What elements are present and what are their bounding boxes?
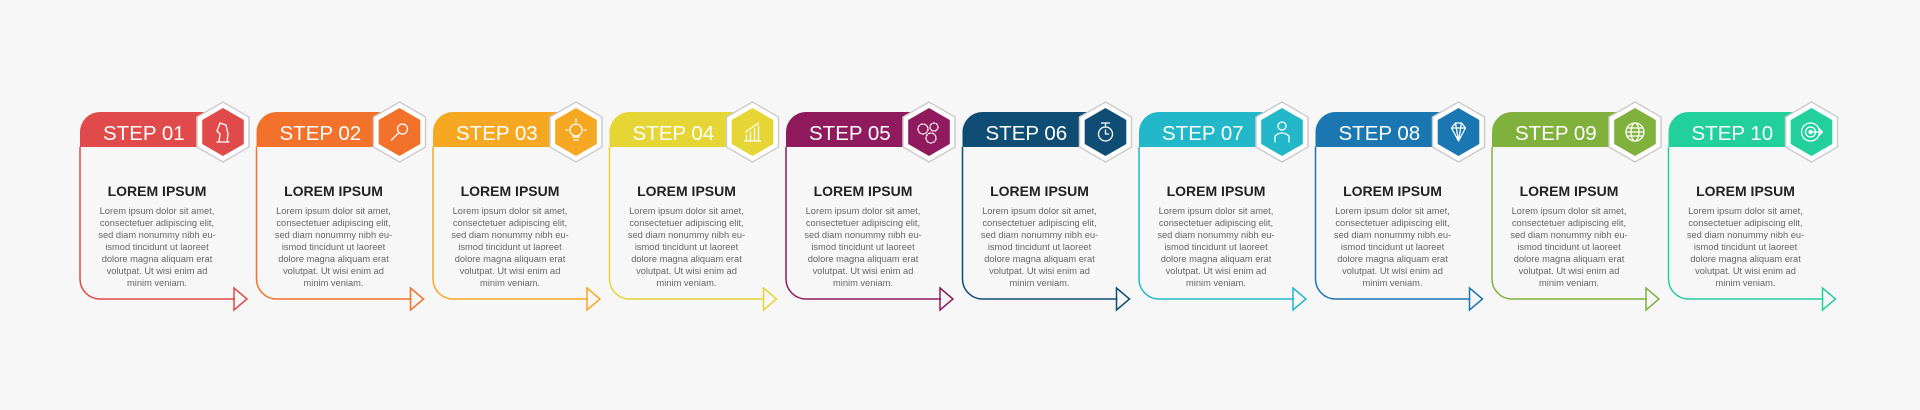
header (256, 112, 406, 147)
step 04: STEP 04 (632, 122, 714, 145)
title: LOREM IPSUM (1520, 183, 1618, 199)
title: LOREM IPSUM (461, 183, 559, 199)
header (1139, 112, 1289, 147)
hex icon: chess knight (197, 102, 249, 162)
step 04 (610, 102, 778, 310)
body text (1334, 206, 1451, 288)
outline (80, 147, 247, 310)
hex icon: target (1786, 102, 1838, 162)
step 08 (1316, 102, 1484, 310)
hex icon: magnifier (374, 102, 426, 162)
body text (1687, 206, 1804, 288)
header (1668, 112, 1818, 147)
title: LOREM IPSUM (1343, 183, 1442, 199)
step 09 (1492, 102, 1661, 310)
step 09: STEP 09 (1515, 122, 1597, 145)
body text (451, 206, 569, 288)
outline (1668, 147, 1836, 310)
outline (610, 147, 776, 310)
step 10 (1668, 102, 1838, 310)
step 10: STEP 10 (1692, 122, 1773, 145)
title: LOREM IPSUM (284, 183, 383, 199)
hex icon: gears (903, 102, 955, 162)
header (1492, 112, 1642, 147)
header (786, 112, 936, 147)
step 01: STEP 01 (103, 122, 185, 145)
step 06: STEP 06 (986, 122, 1067, 145)
header (80, 112, 230, 147)
title: LOREM IPSUM (637, 183, 736, 199)
body text (98, 206, 216, 288)
body text (275, 206, 392, 288)
outline (1492, 147, 1659, 310)
step 08: STEP 08 (1338, 122, 1420, 145)
step 03: STEP 03 (456, 122, 538, 145)
title: LOREM IPSUM (1167, 183, 1265, 199)
outline (962, 147, 1130, 310)
header (962, 112, 1112, 147)
hex icon: bulb (550, 102, 602, 162)
hex icon: clock (1080, 102, 1132, 162)
title: LOREM IPSUM (108, 183, 206, 199)
outline (786, 147, 953, 310)
step 05 (786, 102, 955, 310)
title: LOREM IPSUM (990, 183, 1089, 199)
hex icon: diamond (1432, 102, 1484, 162)
outline (1316, 147, 1482, 310)
title: LOREM IPSUM (1696, 183, 1795, 199)
header (1316, 112, 1466, 147)
step 01 (80, 102, 249, 310)
header (610, 112, 760, 147)
hex icon: person (1256, 102, 1308, 162)
step 07: STEP 07 (1162, 122, 1244, 145)
body text (804, 206, 922, 288)
hex icon: globe (1609, 102, 1661, 162)
body text (1157, 206, 1275, 288)
step 06 (962, 102, 1132, 310)
step 07 (1139, 102, 1308, 310)
body text (1510, 206, 1628, 288)
step 02: STEP 02 (280, 122, 361, 145)
step 02 (256, 102, 426, 310)
body text (981, 206, 1098, 288)
header (433, 112, 583, 147)
step 03 (433, 102, 602, 310)
title: LOREM IPSUM (814, 183, 912, 199)
outline (1139, 147, 1306, 310)
outline (256, 147, 424, 310)
hex icon: chart (726, 102, 778, 162)
body text (628, 206, 745, 288)
outline (433, 147, 600, 310)
step 05: STEP 05 (809, 122, 891, 145)
